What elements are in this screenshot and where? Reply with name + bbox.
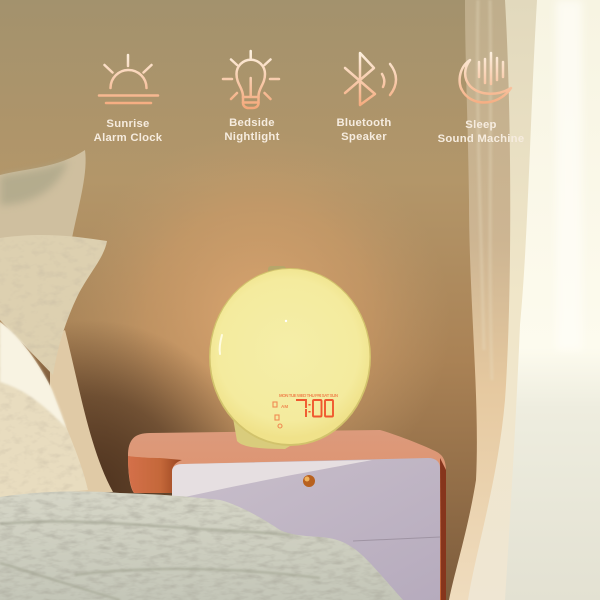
label: sunrise alarm clock: Sunrise bbox=[106, 118, 150, 130]
display bbox=[273, 393, 338, 428]
label: sunrise alarm clock: Alarm Clock bbox=[94, 132, 163, 144]
highlights bbox=[220, 335, 222, 354]
blanket fold bbox=[0, 521, 290, 535]
label: bluetooth speaker: Bluetooth bbox=[337, 117, 391, 129]
stand bbox=[233, 418, 300, 449]
icon: bluetooth with sound waves bbox=[345, 53, 396, 105]
feature: sunrise alarm clock bbox=[94, 55, 163, 144]
feature: bluetooth speaker bbox=[337, 53, 396, 143]
icon: sunrise bbox=[99, 55, 158, 103]
nightstand bbox=[128, 430, 446, 600]
digits 7:00 bbox=[296, 400, 333, 417]
alarm icons bbox=[273, 402, 282, 428]
icon: moon with sound bars bbox=[460, 53, 511, 102]
curtain bbox=[449, 0, 600, 600]
feature: sleep sound machine bbox=[438, 53, 524, 145]
pillow light stripe bbox=[0, 322, 66, 428]
label: sleep sound machine: Sound Machine bbox=[438, 133, 524, 145]
drawer seam bbox=[353, 537, 440, 541]
label: bedside nightlight: Bedside bbox=[229, 117, 275, 129]
face bbox=[210, 269, 370, 444]
label: sleep sound machine: Sleep bbox=[465, 119, 497, 131]
sheer curtain layer bbox=[449, 0, 540, 600]
rim bbox=[209, 268, 371, 446]
top button bbox=[268, 266, 286, 274]
pillows bbox=[0, 150, 113, 498]
front pillow bbox=[0, 235, 107, 375]
lower pillow bbox=[0, 322, 88, 498]
knob bbox=[303, 475, 315, 487]
tall rear pillow bbox=[50, 330, 113, 492]
drawer highlight bbox=[172, 460, 372, 500]
back pillow bbox=[0, 150, 86, 238]
icon: light bulb bbox=[223, 51, 279, 108]
display: MON TUE WED THU FRI SAT SUN bbox=[279, 393, 338, 398]
clock bbox=[209, 266, 371, 449]
feature: bedside nightlight bbox=[223, 51, 280, 143]
main bright curtain bbox=[505, 0, 600, 600]
bed blanket bbox=[0, 491, 403, 600]
display: AM bbox=[281, 404, 288, 409]
label: bedside nightlight: Nightlight bbox=[224, 131, 280, 143]
drawer front bbox=[172, 458, 440, 600]
top and frame bbox=[128, 430, 446, 600]
label: bluetooth speaker: Speaker bbox=[341, 131, 387, 143]
mid cream curtain bbox=[468, 0, 600, 600]
